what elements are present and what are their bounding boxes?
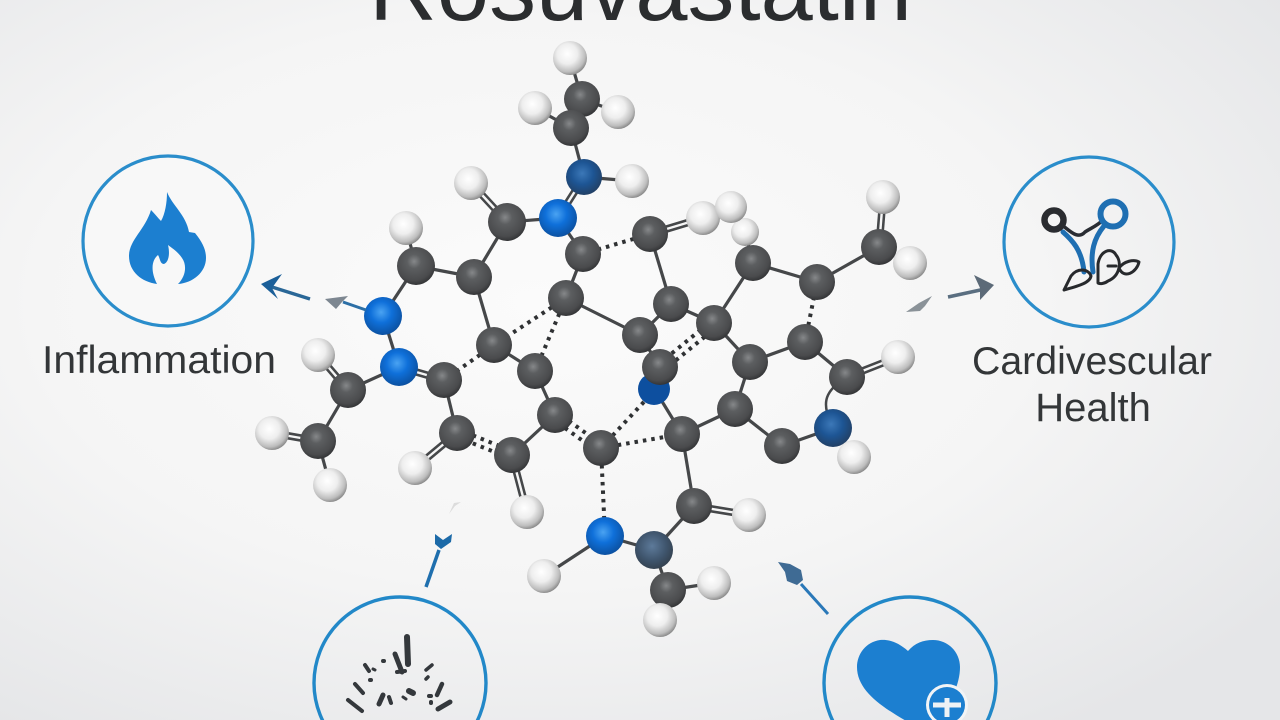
label: Cardivescular Health: Health: [1035, 386, 1151, 430]
icon: scattered particles: [348, 637, 450, 711]
panel: inflammation: [42, 156, 276, 382]
icon circle: cardiovascular health: [1004, 157, 1174, 327]
icon circle: inflammation: [83, 156, 253, 326]
label: Cardivescular Health: Cardivescular: [972, 340, 1212, 383]
icon circle: bottom right: [824, 597, 996, 720]
icon circle: bottom left: [314, 597, 486, 720]
panel: cardiovascular health: [972, 157, 1212, 430]
label: Inflammation: Inflammation: [42, 339, 276, 382]
molecule: rosuvastatin ball-and-stick model: [255, 41, 927, 637]
arrow: to cardiovascular health: [906, 275, 994, 312]
icon: flame: [129, 192, 206, 284]
icon: molecule and plant: [1044, 202, 1139, 290]
arrow: to bottom left panel: [426, 502, 461, 587]
panel: bottom left: [314, 597, 486, 720]
panel: bottom right: [824, 597, 996, 720]
icon: heart with plus badge: [857, 640, 968, 720]
arrow: to inflammation: [261, 274, 366, 310]
arrow: to bottom right panel: [778, 562, 828, 614]
